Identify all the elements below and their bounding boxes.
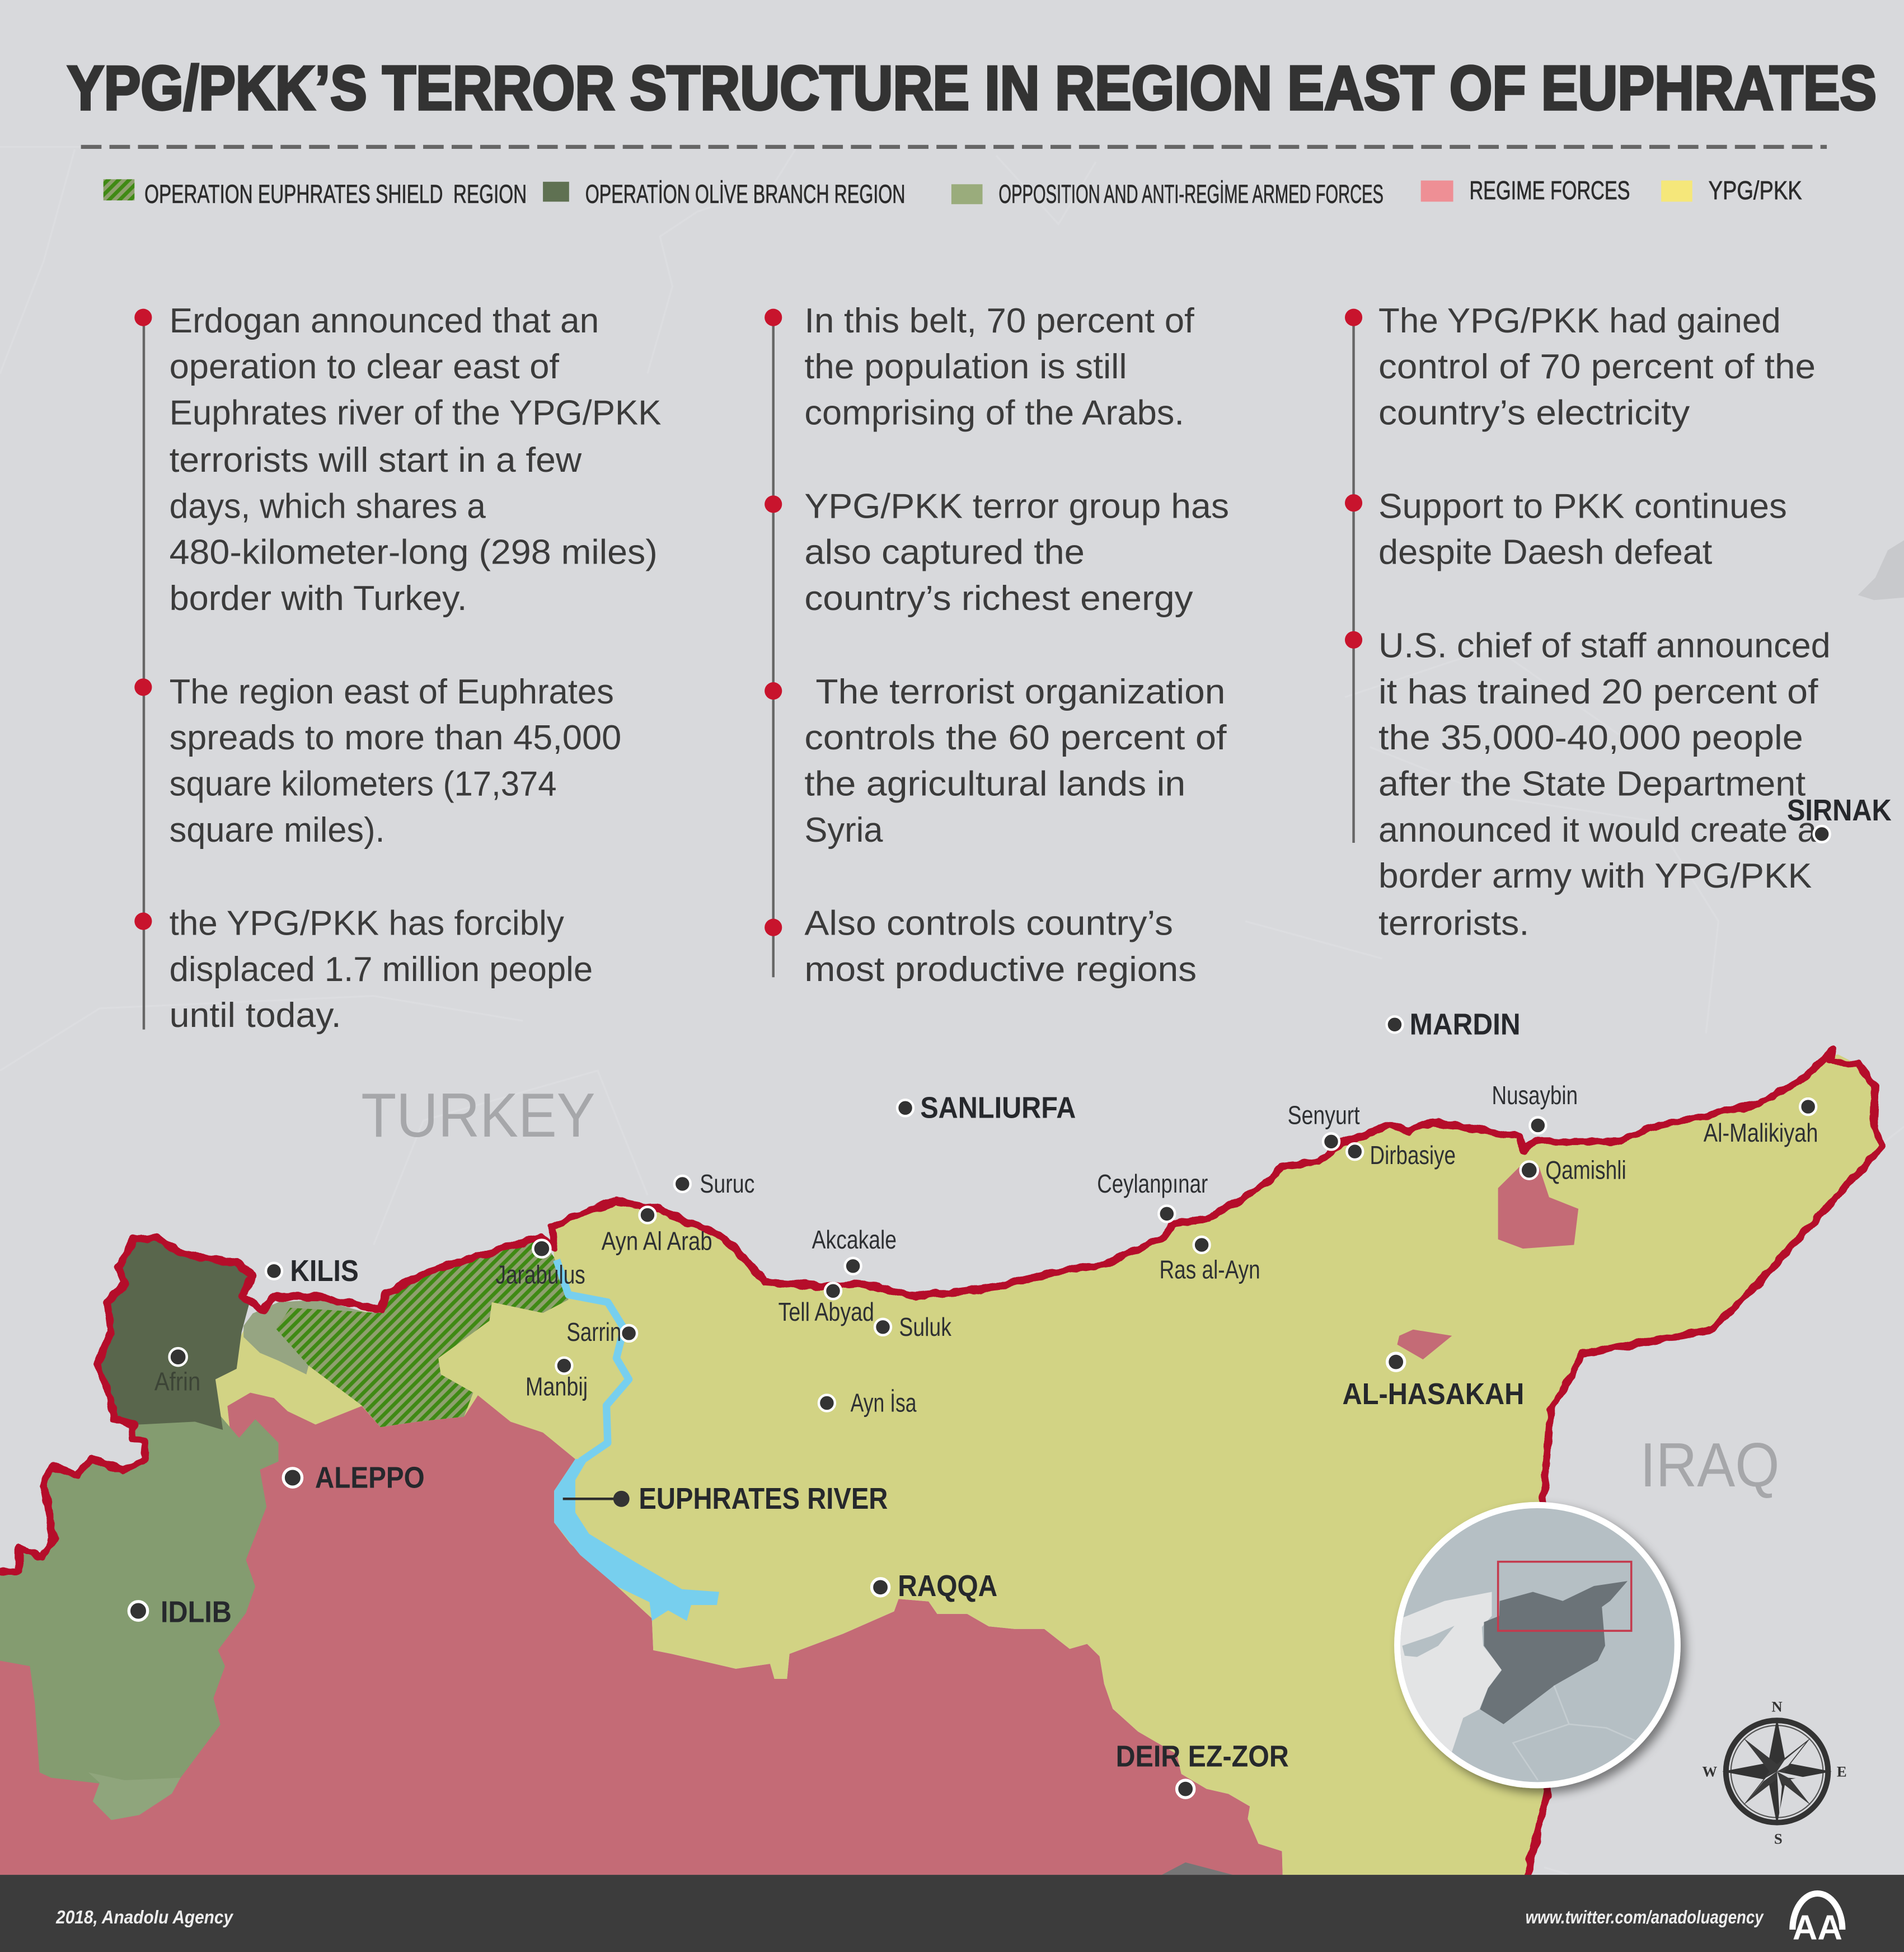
bullet: region size: square kilometers (17,374 [170,764,557,803]
city: Ayn Isa: Ayn İsa [851,1388,917,1418]
legend: Operation Euphrates Shield: OPERATION EUPHRATES SHIELD REGION [144,180,527,209]
legend: YPG/PKK [1661,176,1802,205]
timeline column 1 [134,309,152,1030]
city: Idlib [129,1596,232,1629]
compass rose: E [1837,1763,1847,1780]
bullet: Erdogan announcement [170,302,661,618]
footer url: www.twitter.com/anadoluagency [1526,1907,1764,1928]
bullet: energy: YPG/PKK terror group has [804,487,1229,525]
city: Ceylanpinar: Ceylanpınar [1097,1169,1208,1198]
bullet: displacement: the YPG/PKK has forcibly [170,904,565,943]
compass rose: S [1774,1830,1783,1847]
city: Tell Abyad [779,1283,874,1326]
legend: regime forces [1421,176,1630,205]
city: Ras al-Ayn [1159,1237,1260,1284]
city: Akcakale: Akcakale [812,1225,897,1254]
city: Aleppo: ALEPPO [315,1461,425,1494]
border with Turkey and Iraq [0,1049,1883,1875]
city: Afrin: Afrin [154,1367,200,1396]
city: Suruc: Suruc [700,1169,754,1198]
city: Sanliurfa: SANLIURFA [920,1092,1076,1125]
region: Idlib southern tail [88,1772,181,1820]
city: Mardin: MARDIN [1410,1008,1521,1041]
city: Al-Malikiyah: Al-Malikiyah [1704,1118,1818,1147]
region: Al-Hasakah regime pocket [1397,1330,1452,1359]
legend: Operation Olive Branch [543,180,906,209]
region: YPG/PKK controlled [438,1054,1883,1875]
city: Sirnak: SIRNAK [1787,794,1892,827]
city: Dirbasiye [1347,1141,1456,1170]
city: Kilis [266,1255,359,1288]
region: Idlib opposition [0,1413,279,1786]
region: Operation Euphrates Shield [276,1237,569,1427]
region: Qamishli regime pocket [1498,1167,1578,1249]
city: Nusaybin: Nusaybin [1492,1081,1578,1110]
bullet: Arab population [804,302,1194,433]
city: Nusaybin [1492,1081,1578,1133]
bullet: border army: it has trained 20 percent of [1378,673,1818,711]
inset: Syria [1480,1581,1628,1724]
bullet: Erdogan announcement: Euphrates river of the YPG/PKK [170,394,661,433]
compass rose: W [1703,1763,1718,1780]
city: Al-Hasakah: AL-HASAKAH [1343,1378,1524,1411]
bullet: Arab population: the population is still [804,348,1127,386]
bullet: Erdogan announcement: 480-kilometer-long (298 miles) [170,533,658,572]
region: grey patch south of Deir ez-Zor [1162,1862,1233,1875]
city: Senyurt [1288,1101,1360,1149]
legend: YPG/PKK: YPG/PKK [1709,176,1802,205]
city: Sirnak [1787,794,1892,842]
bullet: region size [170,673,621,850]
city: Akcakale [812,1225,897,1274]
bullet: Arab population: In this belt, 70 percent of [804,302,1194,340]
column 3 text [1345,302,1831,943]
bullet: displacement: displaced 1.7 million people [170,950,593,989]
city: Jarabulus [496,1240,585,1289]
city: Manbij: Manbij [526,1372,588,1401]
bullet: productive regions [804,904,1197,989]
bullet: displacement [170,904,593,1035]
city: Ras al-Ayn: Ras al-Ayn [1159,1255,1260,1284]
bullet: Erdogan announcement: days, which shares a [170,487,486,525]
timeline column 3 [1345,309,1362,843]
city: Manbij [526,1358,588,1401]
bullet: productive regions: Also controls country’s [804,904,1173,943]
city: Raqqa: RAQQA [898,1570,997,1603]
city: Suluk: Suluk [899,1312,951,1341]
bullet: border army: border army with YPG/PKK [1378,857,1812,895]
bullet: region size: The region east of Euphrates [170,673,614,711]
bullet: electricity: control of 70 percent of the [1378,348,1816,386]
inset locator map [1389,1500,1687,1793]
legend [104,176,1802,209]
city: Deir ez-Zor [1116,1740,1289,1798]
inset: Mediterranean / neighbouring land [1400,1592,1502,1752]
bullet: agriculture: controls the 60 percent of [804,719,1227,757]
city: Deir ez-Zor: DEIR EZ-ZOR [1116,1740,1289,1773]
legend: regime forces: REGIME FORCES [1469,176,1630,205]
inset: area rectangle [1498,1562,1631,1631]
bullet: support to PKK: Support to PKK continues [1378,487,1787,525]
city: Kilis: KILIS [290,1255,359,1288]
bullet: border army: announced it would create a [1378,811,1817,850]
city: Ayn Isa [819,1388,917,1418]
city: Suruc [674,1169,754,1198]
bullet: border army: U.S. chief of staff announced [1378,627,1831,665]
bullet: Arab population: comprising of the Arabs. [804,394,1184,433]
city: Senyurt: Senyurt [1288,1101,1360,1130]
city: Sarrin: Sarrin [566,1317,621,1346]
region: small YPG/PKK strip north of Aleppo [215,1337,362,1438]
bullet: electricity: The YPG/PKK had gained [1378,302,1781,340]
bullet: agriculture: Syria [804,811,883,850]
compass rose [1703,1698,1847,1847]
river label with leader [563,1482,888,1515]
bullet: border army: after the State Department [1378,764,1805,803]
bullet: electricity: country’s electricity [1378,394,1690,433]
Euphrates river [554,1260,719,1621]
legend: opposition forces: OPPOSITION AND ANTI-REGİME ARMED FORCES [998,180,1384,209]
city: Al-Hasakah [1343,1353,1524,1411]
bullet: agriculture [804,673,1227,850]
Sirnak-side lake patch [1858,540,1904,600]
city: Al-Malikiyah [1704,1099,1818,1147]
bullet: border army [1378,627,1831,943]
legend: Operation Euphrates Shield [104,179,527,209]
bullet: energy [804,487,1229,618]
bullet: productive regions: most productive regions [804,950,1197,989]
bullet: Erdogan announcement: operation to clear east of [170,348,560,386]
city: Qamishli: Qamishli [1545,1156,1626,1185]
region: regime forces [0,1393,1283,1875]
country label: Iraq: IRAQ [1640,1430,1780,1500]
bullet: support to PKK [1378,487,1787,572]
city: Ayn Al Arab: Ayn Al Arab [602,1226,712,1255]
bullet: agriculture: The terrorist organization [815,673,1225,711]
legend: opposition forces [951,180,1384,209]
column 1 text [134,302,661,1035]
bullet: Erdogan announcement: terrorists will start in a few [170,441,582,480]
logo: AA: AA [1793,1909,1842,1948]
city: Ceylanpinar [1097,1169,1208,1222]
bullet: displacement: until today. [170,996,341,1035]
city: Suluk [875,1312,951,1341]
city: Ayn Al Arab [602,1207,712,1255]
region: underlay beneath northern pockets [218,1241,575,1444]
city: Qamishli [1521,1156,1626,1185]
bullet: region size: square miles). [170,811,385,850]
bullet: energy: country’s richest energy [804,579,1193,618]
region: opposition north of Aleppo [243,1299,373,1382]
bullet: border army: terrorists. [1378,904,1529,943]
bullet: border army: the 35,000-40,000 people [1378,719,1803,757]
bullet: support to PKK: despite Daesh defeat [1378,533,1712,572]
city: Dirbasiye: Dirbasiye [1370,1141,1456,1170]
legend: Operation Olive Branch: OPERATİON OLİVE BRANCH REGION [585,180,906,209]
river label with leader: EUPHRATES RIVER [639,1482,888,1515]
bullet: agriculture: the agricultural lands in [804,764,1185,803]
column 2 text [765,302,1229,989]
footer bar [0,1875,1904,1952]
footer credit: 2018, Anadolu Agency [55,1907,233,1928]
region: Operation Olive Branch (Afrin) [97,1238,253,1430]
inset: neighbouring borders [1512,1686,1635,1781]
country label: Turkey: TURKEY [361,1080,595,1150]
bullet: Erdogan announcement: border with Turkey. [170,579,467,618]
city: Idlib: IDLIB [161,1596,232,1629]
map [0,1049,1883,1875]
compass rose: N [1771,1698,1783,1715]
bullet: electricity [1378,302,1816,433]
bullet: Erdogan announcement: Erdogan announced that an [170,302,599,340]
city: Afrin [154,1348,200,1396]
bullet: energy: also captured the [804,533,1085,572]
city: Jarabulus: Jarabulus [496,1260,585,1289]
timeline column 2 [765,309,782,977]
city: Tell Abyad: Tell Abyad [779,1297,874,1326]
inset: Cyprus [1402,1626,1455,1657]
bullet: region size: spreads to more than 45,000 [170,719,621,757]
